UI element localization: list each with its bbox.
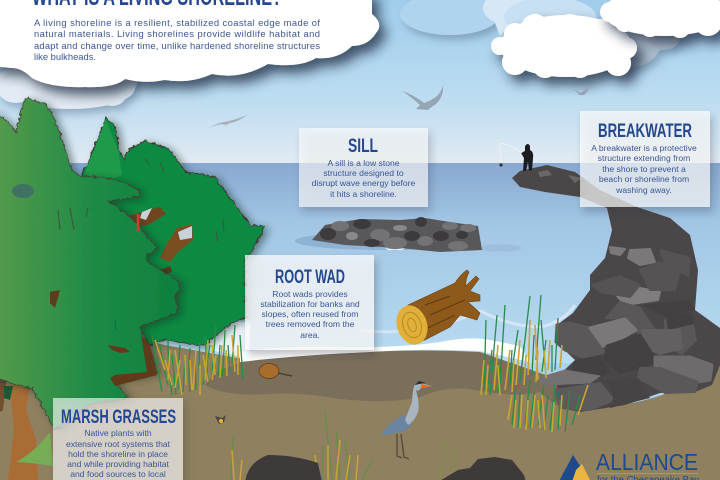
text: root wad: slopes, often reused from	[262, 309, 358, 319]
text: breakwater: A breakwater is a protective	[591, 143, 697, 153]
foam	[240, 338, 530, 362]
text: sill	[312, 158, 416, 199]
distant clouds	[400, 0, 681, 68]
sand, main	[0, 355, 720, 480]
foreground grass tuft green	[16, 432, 53, 466]
text: root wad: stabilization for banks and	[260, 299, 360, 309]
icon: gull near trees	[208, 115, 247, 128]
marsh grass, by trees	[152, 325, 243, 395]
white cloud, centre right	[491, 14, 637, 78]
intro text: adapt and change over time, unlike hardened shoreline structures	[34, 40, 320, 51]
text: marsh grasses: extensive root systems that	[66, 439, 171, 449]
intro text: A living shoreline is a resilient, stabilized coastal edge made of	[34, 17, 320, 28]
text: root wad: area.	[300, 330, 320, 340]
sand, wet	[205, 350, 560, 420]
intro text: natural materials. Living shorelines provide wildlife habitat and	[34, 28, 320, 39]
wave line	[360, 305, 575, 332]
front tree	[0, 98, 180, 430]
text: marsh grasses: and while providing habitat	[67, 459, 169, 469]
sill rock structure	[295, 217, 522, 252]
fisherman	[499, 143, 533, 171]
text: marsh grasses: hold the shoreline in place	[68, 449, 168, 459]
icon: gull large	[402, 86, 443, 110]
marsh grass, by jetty	[481, 295, 588, 432]
water	[0, 163, 720, 363]
text: breakwater: beach or shoreline from	[599, 174, 689, 184]
text: marsh grasses: and food sources to local	[70, 469, 166, 479]
text: root wad: trees removed from the	[266, 319, 355, 329]
heading: sill: SILL	[348, 136, 378, 157]
text: marsh grasses	[66, 428, 171, 479]
panel: sill	[299, 128, 428, 207]
logo: ALLIANCE	[596, 449, 698, 475]
cloud behind main cloud	[0, 67, 137, 109]
tree branch ticks	[58, 158, 224, 330]
text: breakwater	[591, 143, 697, 195]
text: marsh grasses: Native plants with	[84, 428, 152, 438]
tree gaps with branches	[112, 207, 193, 276]
text: root wad	[260, 289, 360, 340]
panel: breakwater	[580, 111, 710, 207]
logo	[558, 449, 699, 480]
horseshoe crab	[259, 364, 292, 378]
icon: gull small	[571, 84, 590, 95]
sand under trees	[120, 335, 250, 400]
tree shade patch	[12, 184, 34, 198]
text: root wad: Root wads provides	[272, 289, 348, 299]
tree trunk	[0, 380, 38, 480]
heading: root wad: ROOT WAD	[275, 267, 345, 288]
intro text: like bulkheads.	[34, 51, 96, 62]
text: breakwater: washing away.	[615, 185, 672, 195]
text: sill: A sill is a low stone	[327, 158, 400, 168]
marsh grass, foreground	[231, 412, 455, 480]
foreground rock left	[245, 455, 322, 480]
foam patch behind grass	[205, 322, 250, 358]
small red bird	[137, 214, 139, 231]
white cloud, top right	[600, 0, 720, 38]
breakwater rock jetty	[512, 165, 720, 412]
text: breakwater: structure extending from	[598, 153, 690, 163]
back tree top highlight	[84, 120, 122, 180]
root wad log	[392, 270, 480, 349]
small bird on sand	[215, 415, 226, 424]
text: sill: it hits a shoreline.	[330, 189, 397, 199]
panel: root wad	[245, 255, 374, 350]
text: breakwater: the shore to prevent a	[602, 164, 686, 174]
foreground rock right	[438, 457, 526, 480]
text: sill: disrupt wave energy before	[312, 178, 416, 188]
underside shadows	[50, 290, 157, 386]
sky background	[0, 0, 720, 164]
back tree	[70, 118, 265, 346]
heading: marsh grasses: MARSH GRASSES	[61, 407, 176, 428]
panel: marsh grasses	[53, 398, 183, 480]
heron	[381, 381, 432, 459]
text: sill: structure designed to	[323, 168, 404, 178]
intro text	[34, 17, 320, 62]
main title cloud	[0, 0, 379, 87]
